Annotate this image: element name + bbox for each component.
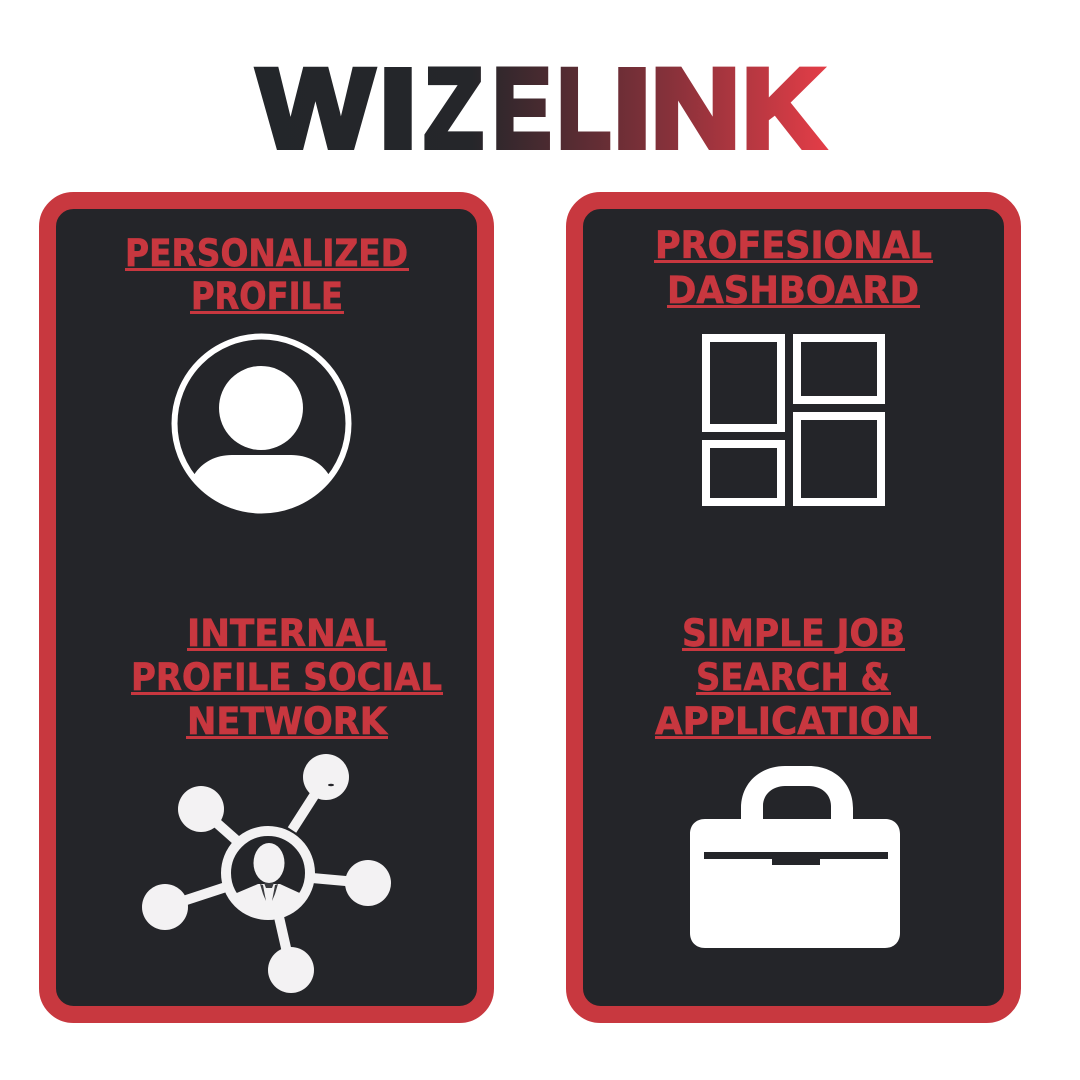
title	[258, 46, 824, 171]
title: E	[493, 46, 551, 171]
heading: simple job search and application: SEARCH &	[696, 656, 890, 699]
title: K	[742, 46, 824, 171]
title: N	[651, 46, 740, 171]
heading: simple job search and application: APPLICATION	[655, 700, 920, 743]
heading: simple job search and application	[655, 612, 931, 743]
heading: professional dashboard	[654, 224, 933, 312]
title: I	[379, 46, 417, 171]
title: Z	[424, 46, 483, 171]
title: W	[258, 46, 374, 171]
heading: personalized profile: PROFILE	[191, 275, 343, 318]
person in hub	[236, 843, 300, 910]
heading: simple job search and application: SIMPLE JOB	[682, 612, 905, 655]
title: I	[613, 46, 651, 171]
heading: professional dashboard: DASHBOARD	[667, 269, 919, 312]
panel: right	[574, 200, 1012, 1014]
icon: user profile	[170, 336, 353, 520]
icon: dashboard grid	[706, 338, 881, 502]
heading: personalized profile	[125, 232, 409, 318]
title: L	[557, 46, 611, 171]
heading: internal profile social network: INTERNAL	[187, 612, 386, 655]
heading: internal profile social network: NETWORK	[187, 700, 388, 743]
icon: people network	[142, 754, 391, 993]
heading: internal profile social network: PROFILE SOCIAL	[131, 656, 442, 699]
heading: professional dashboard: PROFESIONAL	[655, 224, 932, 267]
panel: left	[48, 200, 486, 1014]
heading: personalized profile: PERSONALIZED	[125, 232, 408, 275]
heading: internal profile social network	[131, 612, 443, 743]
icon: briefcase	[690, 766, 900, 948]
